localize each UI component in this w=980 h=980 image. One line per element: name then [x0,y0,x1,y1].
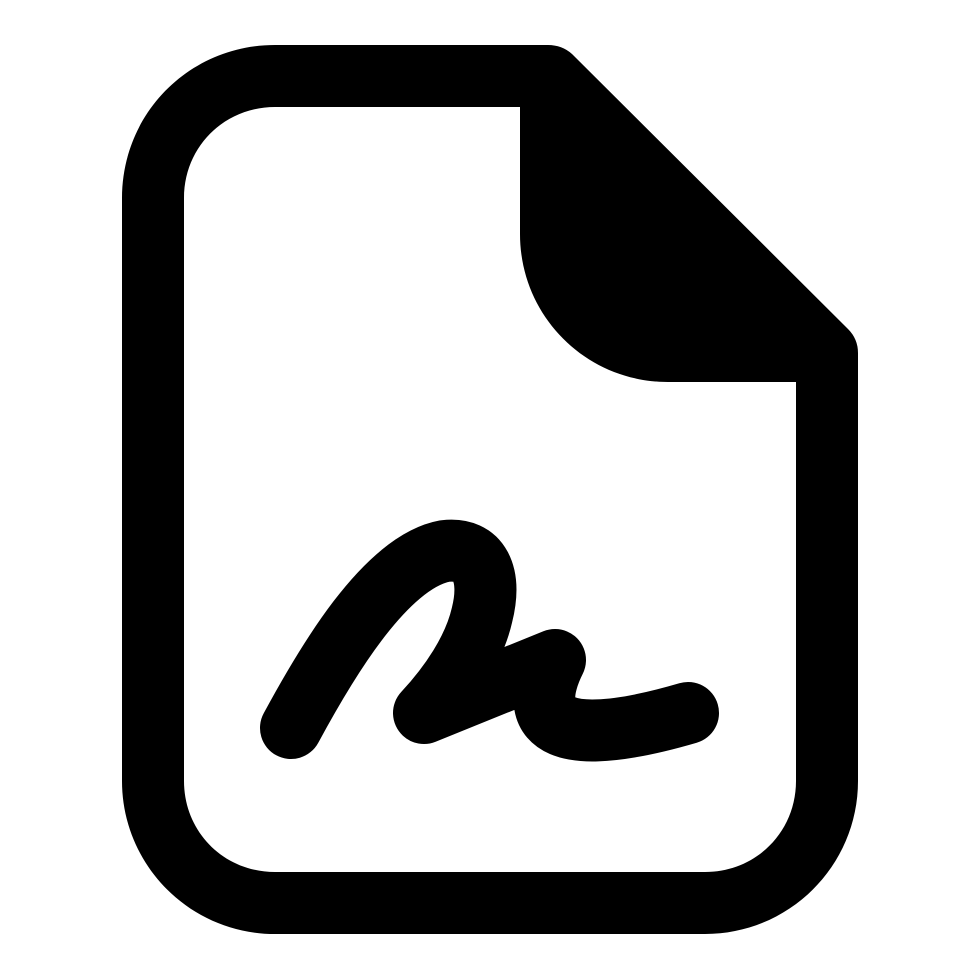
document outline with folded corner [122,45,858,934]
signature scribble [291,551,688,730]
